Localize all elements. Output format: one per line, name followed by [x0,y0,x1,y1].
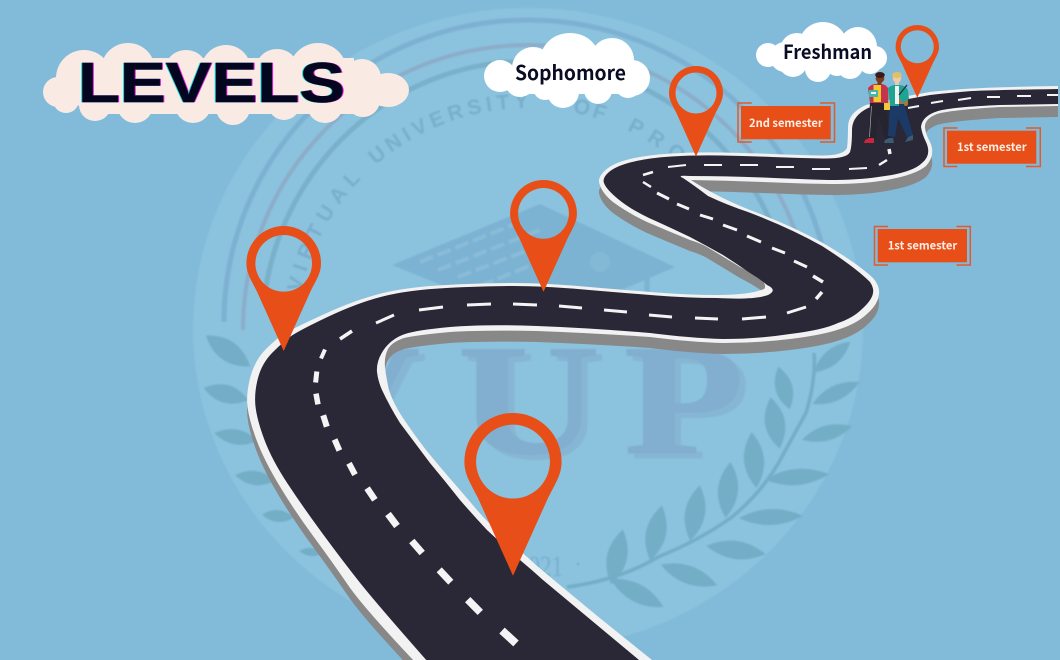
watermark: university seal: PRO [628,118,684,154]
pin: third map marker [510,180,577,292]
tag text: 1st semester: 1st semester [957,139,1028,155]
road centre dashes [316,95,1058,643]
watermark: university seal: UNIVERSITY [368,94,526,162]
watermark: university seal: VIRTUAL [287,176,360,288]
pin: fourth map marker [669,66,723,156]
pin: fifth map marker [896,25,939,98]
watermark: university seal: VUP [278,313,744,487]
watermark: university seal: 2021 [517,550,563,583]
watermark: university seal: OF [574,100,607,118]
label: Freshman: Freshman [783,36,872,65]
watermark: university seal: · [574,552,582,578]
illustration: two students walking [864,72,913,143]
cloud: Freshman [756,22,887,82]
pin: first map marker [464,413,562,576]
tag text: 1st semester: 1st semester [888,237,958,253]
cloud: Sophomore [484,33,650,108]
watermark: university seal [194,9,862,636]
tag text: 2nd semester: 2nd semester [749,115,824,131]
student two [884,72,913,143]
tag: 1st semester (Freshman) [944,128,1040,166]
heading: LEVELS: LEVELS [78,51,345,115]
pin: second map marker [246,226,321,351]
road: winding path [247,86,1058,660]
student one [864,72,891,143]
title cloud: LEVELS [43,43,409,125]
tag: 2nd semester [738,103,834,142]
tag: 1st semester (Sophomore) [874,226,970,265]
label: Sophomore: Sophomore [515,57,626,86]
